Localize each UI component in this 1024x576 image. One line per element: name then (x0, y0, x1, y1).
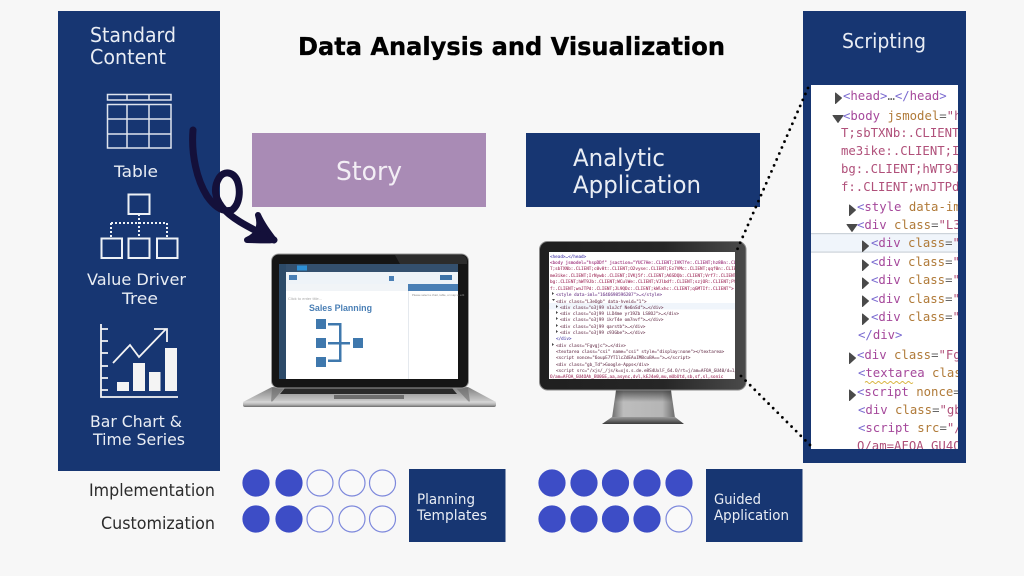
label: value driver tree: Value Driver (87, 270, 186, 289)
panel: story (252, 133, 486, 207)
monitor code text: O/am=AFOA_GU4OAh_BU0GE,aa,async,dvl,kEJ4e0,mu,mUbUtd,sb,sf,sl,sonic (550, 374, 724, 380)
code view: <div class="o3j99" (871, 255, 1004, 269)
label: value driver tree: Tree (121, 289, 158, 308)
rating dots: story (243, 470, 396, 532)
monitor code text (549, 254, 735, 379)
laptop lid (272, 254, 468, 388)
badge: guided application: Application (714, 508, 789, 524)
panel: scripting (803, 11, 966, 463)
code view: <div class="o3j99" (871, 292, 1004, 306)
code view: O/am=AFOA_GU4OAh (857, 439, 975, 453)
label: bar chart and time series: Time Series (92, 430, 185, 449)
label: table: Table (113, 162, 158, 181)
monitor code text: <script src="/xjs/_/js/k=xjs.s.de.e8S4UxlF_64.O/rt=j/am=AFOA_GU40/d=1/ed=1/rs=ACT90o (556, 368, 774, 374)
monitor code text: </div> (556, 336, 572, 342)
monitor frame (540, 242, 746, 390)
monitor code text: <div class="Fgvgjc">…</div> (556, 343, 626, 349)
label: bar chart and time series: Bar Chart & (90, 412, 182, 431)
title: Data Analysis and Visualization (298, 32, 725, 61)
monitor code text: <div class="o3j99 ikrT4e om7nvf">…</div> (560, 317, 664, 323)
monitor code text: <div class="L3eOgb" data-hveid="1"> (556, 299, 647, 305)
laptop screen: Please select a chart, table, or map to edit (412, 293, 464, 297)
code view: <body jsmodel="hspDDf" (843, 109, 1006, 123)
flow diagram (316, 319, 363, 367)
badge: planning templates (409, 469, 506, 542)
badge: guided application (706, 469, 802, 542)
panel: analytic application: Application (573, 171, 701, 199)
code view: me3ike:.CLIENT;IrNywb (841, 144, 996, 158)
monitor code text: <textarea class="csi" name="csi" style="display:none"></textarea> (556, 349, 725, 355)
laptop screen (279, 264, 464, 379)
code view: T;sbTXNb:.CLIENT;c0v8t (841, 126, 1004, 140)
code view (811, 85, 958, 449)
monitor with code (539, 241, 746, 424)
badge: guided application: Guided (714, 492, 761, 508)
icon: table (108, 94, 171, 148)
code view: <div class="o3j99" (871, 236, 1004, 250)
code view: <div class="o3j99" (871, 310, 1004, 324)
monitor code text: <script nonce="6oupE7YT1lcZdEAuIMBcuBA==">…</script> (556, 355, 691, 361)
panel: standard content (58, 11, 220, 471)
implementation rating labels: Implementation (89, 481, 215, 500)
code view: <div class="L3eOgb" (857, 218, 998, 232)
monitor stand (612, 390, 675, 418)
dotted connector lines (737, 88, 811, 446)
monitor code text: <style data-iml="1646698596207">…</style> (556, 292, 662, 298)
panel heading: standard content: Standard (90, 23, 176, 47)
icon: bar chart and time series (101, 324, 178, 397)
label: value driver tree (87, 270, 186, 308)
panel: story: Story (336, 157, 402, 187)
code view: </div> (858, 328, 902, 342)
monitor code text: <div class="gb_Td">Google-Apps</div> (556, 362, 650, 368)
code view: f:.CLIENT;wnJTPd:.CLIENT (841, 180, 1019, 194)
label: bar chart and time series (90, 412, 185, 449)
chart heading: sales planning: Sales Planning (309, 302, 372, 313)
monitor code text: T;sbTXNb:.CLIENT;c0v8t:.CLIENT;O2vyse:.CLIENT;Ez7VMc:.CLIENT;qqf0n:.CLIENT; (550, 266, 744, 272)
disclosure arrows (833, 93, 868, 400)
code view: <head>…</head> (843, 89, 947, 103)
badge: planning templates: Planning (417, 492, 475, 508)
panel: analytic application: Analytic (573, 144, 665, 172)
code view: <textarea class (858, 366, 969, 380)
monitor code text: f:.CLIENT;wnJTPd:.CLIENT;JL9QDc:.CLIENT;kWlxhc:.CLIENT;qGMTIf:.CLIENT"> (550, 286, 734, 292)
monitor code text: me3ike:.CLIENT;IrNywb:.CLIENT;IVKj5f:.CLIENT;A6SDQb:.CLIENT;Vrf7:.CLIENT; (550, 273, 739, 279)
panel heading: standard content (90, 23, 176, 69)
implementation rating labels: Customization (101, 514, 215, 533)
monitor code text: <div class="o3j99 qarstb">…</div> (560, 324, 646, 330)
rating dots: analytic application (539, 470, 692, 532)
monitor code text: bg:.CLIENT;hWT9Jb:.CLIENT;WCulWe:.CLIENT;VJlbdf:.CLIENT;szjOR:.CLIENT;PY1 (550, 279, 739, 285)
panel: scripting: Scripting (842, 29, 926, 53)
monitor code text: <div class="o3j99 c93Gbe">…</div> (560, 330, 646, 336)
icon: value driver tree (102, 194, 178, 258)
code view: <script src="/xjs" (858, 421, 991, 435)
code view: <div class="o3j99" (871, 273, 1004, 287)
monitor code text: <div class="o3j99 n1xJcf Ne6nSd">…</div> (560, 305, 664, 311)
monitor code text: <head>…</head> (550, 254, 587, 260)
code view: <script nonce="6o" (857, 385, 990, 399)
monitor code text: <div class="o3j99 LLD4me yr19Zb LS8OJ">…</div> (560, 311, 679, 317)
badge: planning templates: Templates (416, 508, 487, 524)
hand-drawn arrow (193, 130, 274, 240)
laptop base (243, 387, 496, 402)
implementation rating labels (89, 481, 215, 533)
code view: <style data-iml (857, 200, 968, 214)
monitor code text: <body jsmodel="hspDDf" jsaction="YUC7He:.CLIENT;IVKTfe:.CLIENT;hz8Bn:.CLIENT; (550, 260, 749, 266)
code view: <div class="gb_Td" (858, 403, 991, 417)
laptop screen: Click to enter title... (288, 296, 322, 301)
code view: bg:.CLIENT;hWT9Jb:.CLIENT (841, 162, 1024, 176)
panel: analytic application (526, 133, 760, 207)
panel heading: standard content: Content (90, 45, 166, 69)
code view: <div class="Fgvgjc" (857, 348, 998, 362)
laptop with sales planning screen (243, 254, 496, 407)
